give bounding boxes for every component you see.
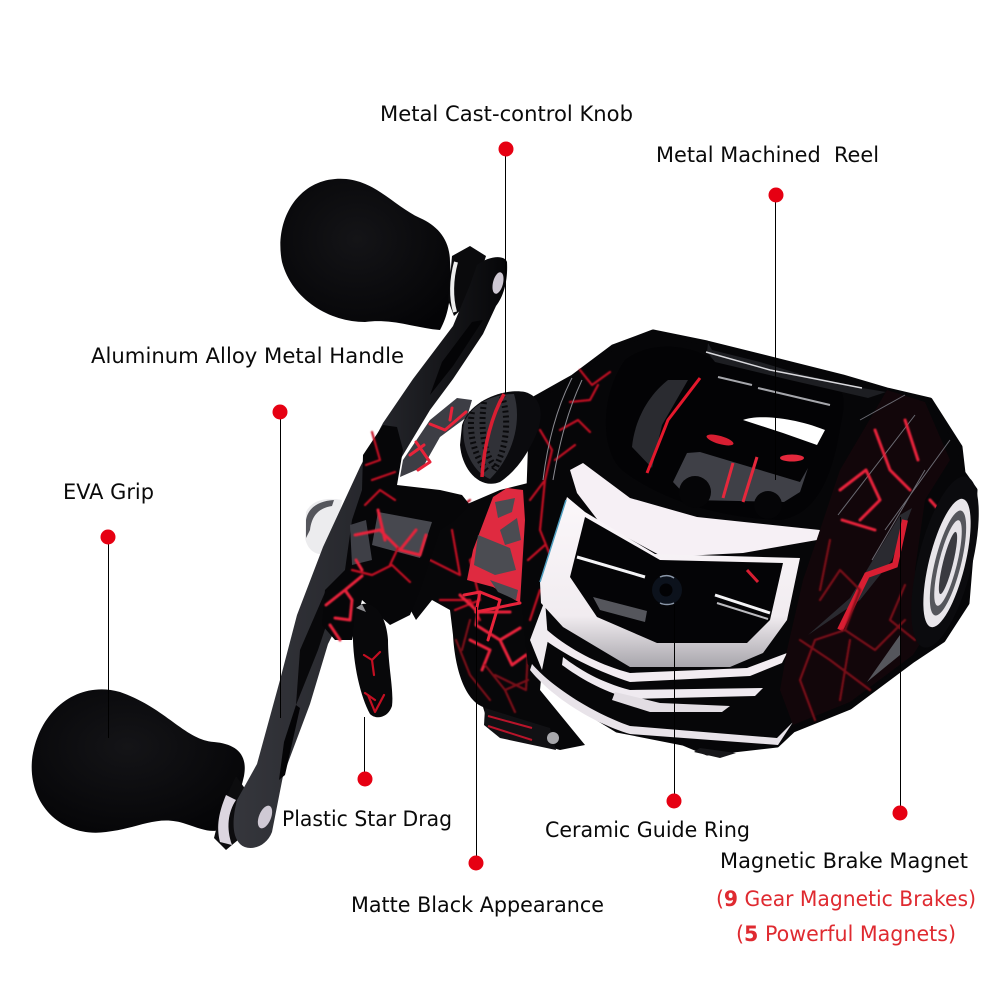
leader: star drag (364, 717, 366, 779)
leader: guide ring (674, 605, 676, 801)
leader: EVA grip (108, 537, 110, 738)
icon: handle lock nut (305, 499, 342, 554)
reel illustration (32, 179, 992, 850)
leader: reel (774, 195, 776, 480)
leader: brake magnet (900, 517, 902, 813)
label: Magnetic Brake Magnet: Magnetic Brake Magnet (720, 849, 968, 873)
hole through spool frame (743, 417, 825, 445)
label: Matte Black Appearance: Matte Black Appearance (351, 893, 604, 917)
icon: line guide foot (484, 708, 556, 750)
label: Plastic Star Drag: Plastic Star Drag (282, 807, 452, 831)
label: 5 Powerful Magnets: (5 Powerful Magnets) (736, 922, 956, 946)
icon: upper flank crackle (528, 370, 610, 620)
icon: star drag lever (353, 604, 392, 717)
label: EVA Grip: EVA Grip (63, 480, 154, 504)
leader: matte appearance (476, 607, 478, 863)
leader: handle (280, 412, 282, 718)
icon: chrome lower frame (540, 497, 800, 667)
label: 9 Gear Magnetic Brakes: (9 Gear Magnetic Brakes) (716, 887, 976, 911)
icon: front side plate crackle (464, 488, 525, 640)
icon: handle hub and star drag mount (322, 425, 470, 640)
marker dots (100, 142, 908, 870)
icon: front gear cone and lower housing (405, 480, 585, 750)
icon: aluminum handle arm (234, 257, 507, 848)
icon: rear side crackle pattern (800, 420, 948, 720)
icon: bottom EVA grip knob (32, 689, 246, 850)
label: Metal Machined Reel: Metal Machined Reel (656, 143, 879, 167)
icon: rear side plate (780, 390, 950, 725)
icon: top EVA grip knob (280, 179, 486, 330)
leader: cast control knob (504, 149, 506, 394)
icon: spool (673, 452, 808, 502)
icon: cast control knob (460, 391, 541, 484)
label: Metal Cast-control Knob: Metal Cast-control Knob (380, 102, 633, 126)
icon: cast control lever (400, 398, 472, 477)
icon: ceramic guide ring (652, 575, 682, 605)
icon: chrome level-wind bridge (570, 463, 820, 557)
icon: main reel body (525, 332, 992, 758)
label: Ceramic Guide Ring: Ceramic Guide Ring (545, 818, 750, 842)
icon: level-wind window (570, 517, 783, 643)
label: Aluminum Alloy Metal Handle: Aluminum Alloy Metal Handle (91, 344, 404, 368)
icon: brake dial (898, 470, 992, 654)
icon: spool window (606, 347, 844, 520)
icon: chrome base fins (530, 600, 793, 758)
